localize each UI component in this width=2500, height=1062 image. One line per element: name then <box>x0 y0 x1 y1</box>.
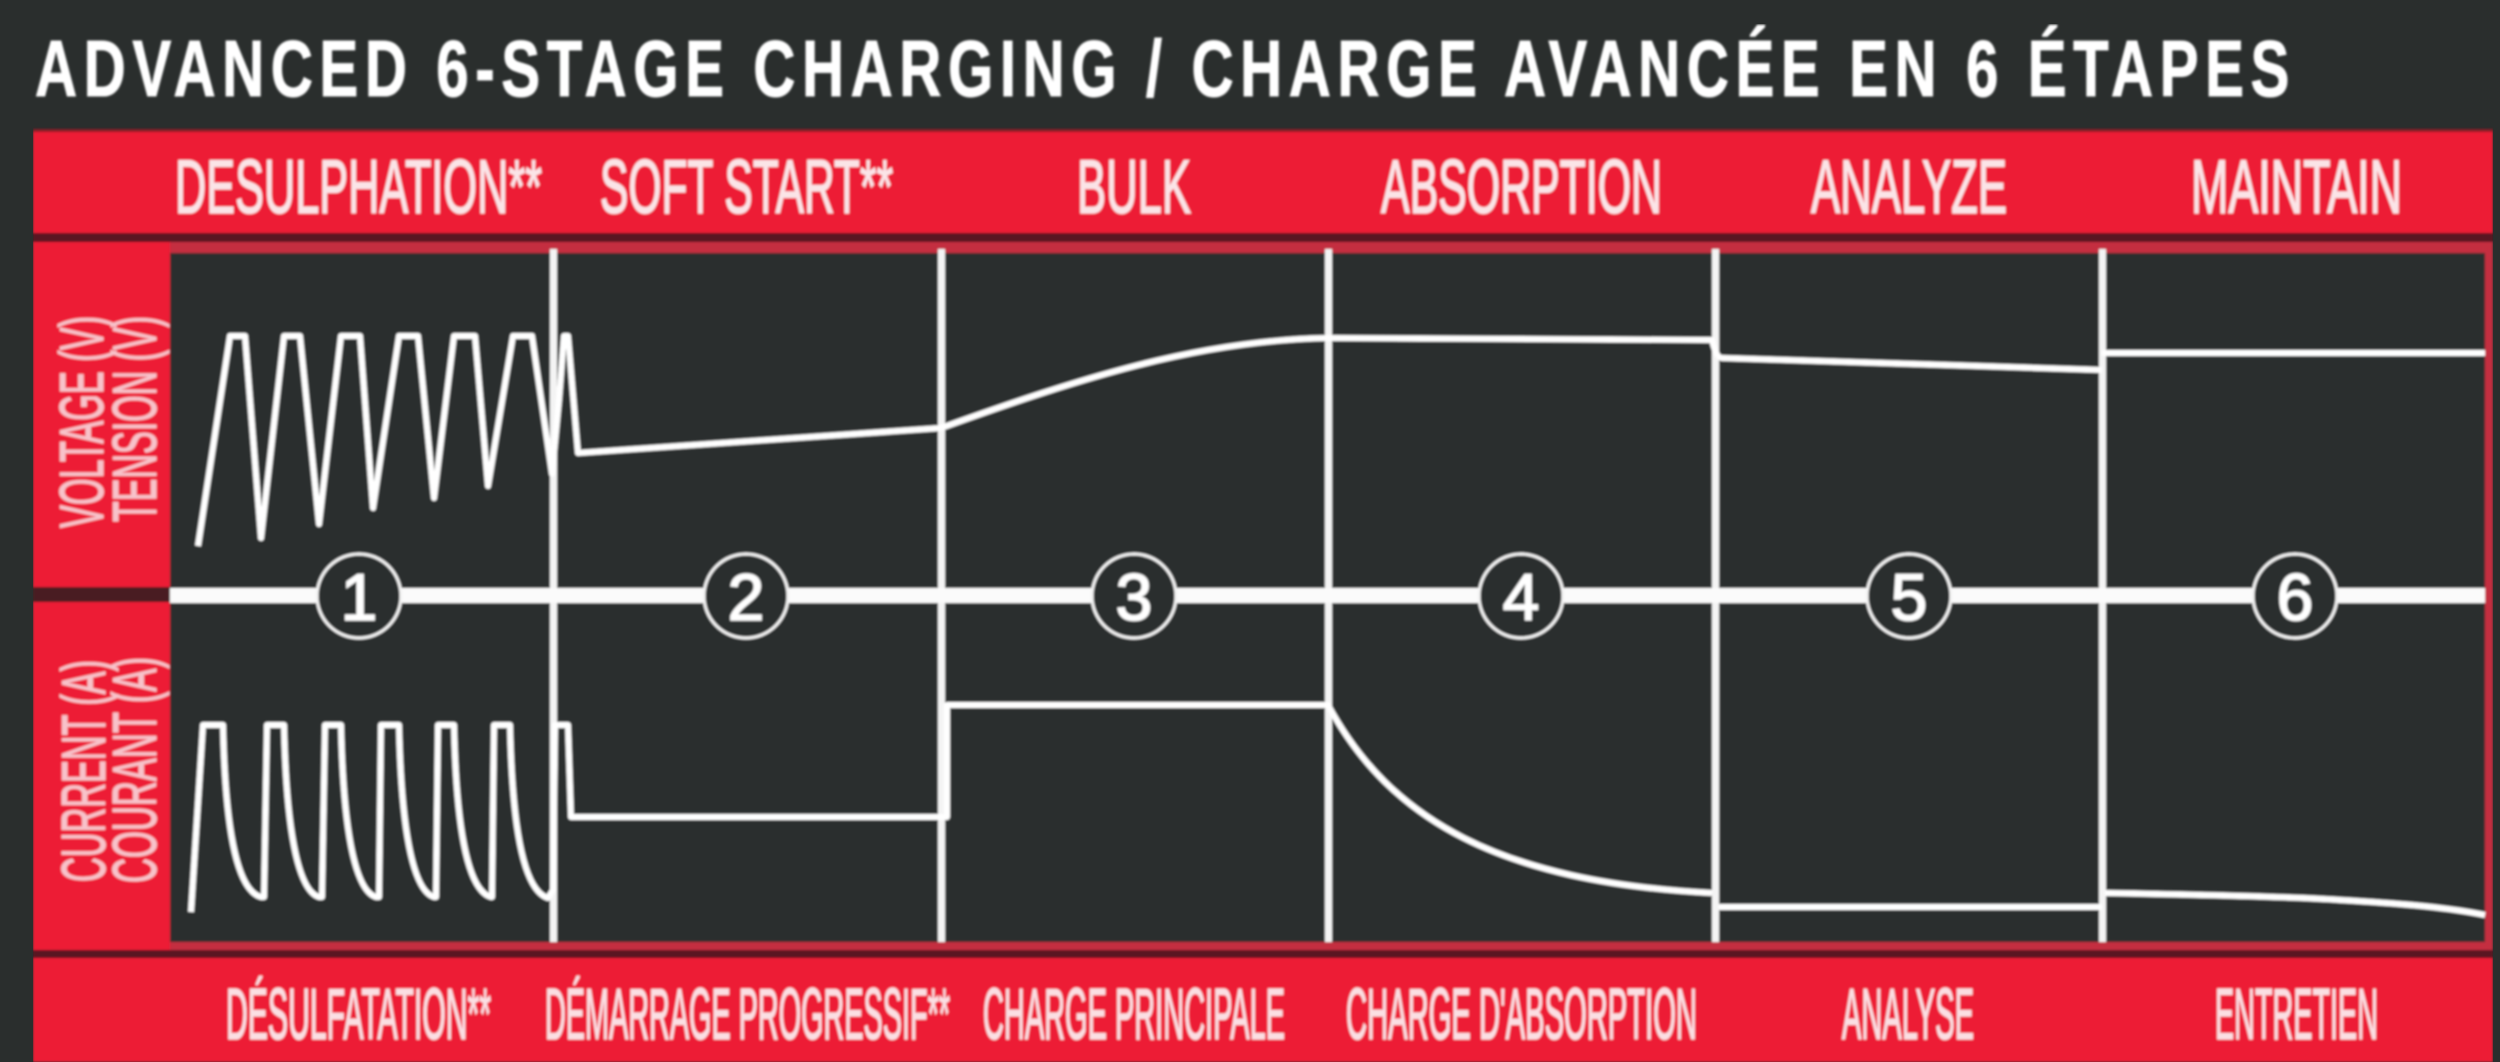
axis label: tension: TENSION (V) <box>101 316 170 522</box>
panel: chart frame and dark plot area <box>33 242 2493 950</box>
step marker 1: 1 <box>341 560 377 634</box>
axis label: current: CURRENT (A) <box>50 660 119 882</box>
step marker 2 <box>704 554 788 638</box>
stage divider lines <box>550 249 2106 942</box>
stage name: absorption: ABSORPTION <box>1381 145 1662 230</box>
panel: bottom band with French stage names: DÉSULFATATION** <box>226 975 491 1055</box>
step marker 3 <box>1092 554 1176 638</box>
panel: voltage axis label <box>33 242 170 587</box>
step marker 1 <box>317 554 401 638</box>
step marker 2: 2 <box>728 560 764 634</box>
step marker 6: 6 <box>2277 560 2313 634</box>
horizontal centre axis <box>170 588 2485 603</box>
chart: current curve <box>191 705 2485 915</box>
panel: bottom band with French stage names <box>33 950 2493 1062</box>
stage name: desulphation: DESULPHATION** <box>175 145 542 230</box>
axis label: courant: COURANT (A) <box>101 657 170 883</box>
stage name: analyze: ANALYZE <box>1811 145 2007 230</box>
step marker 4: 4 <box>1503 560 1539 634</box>
step marker 4 <box>1479 554 1563 638</box>
panel: bottom band with French stage names: CHARGE D'ABSORPTION <box>1346 975 1697 1055</box>
panel: bottom band with French stage names: ANALYSE <box>1842 975 1974 1055</box>
step marker 6 <box>2253 554 2337 638</box>
chart: voltage curve <box>198 336 2485 546</box>
step marker 5: 5 <box>1891 560 1927 634</box>
stage name: bulk: BULK <box>1077 145 1191 230</box>
panel: bottom band with French stage names: CHARGE PRINCIPALE <box>983 975 1285 1055</box>
divider between axis labels <box>33 587 170 602</box>
step marker 5 <box>1867 554 1951 638</box>
panel: current axis label <box>33 602 170 950</box>
stage name: soft start: SOFT START** <box>600 145 893 230</box>
panel: bottom band with French stage names: DÉMARRAGE PROGRESSIF** <box>545 975 950 1055</box>
axis label: voltage: VOLTAGE (V) <box>48 316 117 528</box>
panel: top header band with English stage names <box>33 129 2493 242</box>
step marker 3: 3 <box>1116 560 1152 634</box>
